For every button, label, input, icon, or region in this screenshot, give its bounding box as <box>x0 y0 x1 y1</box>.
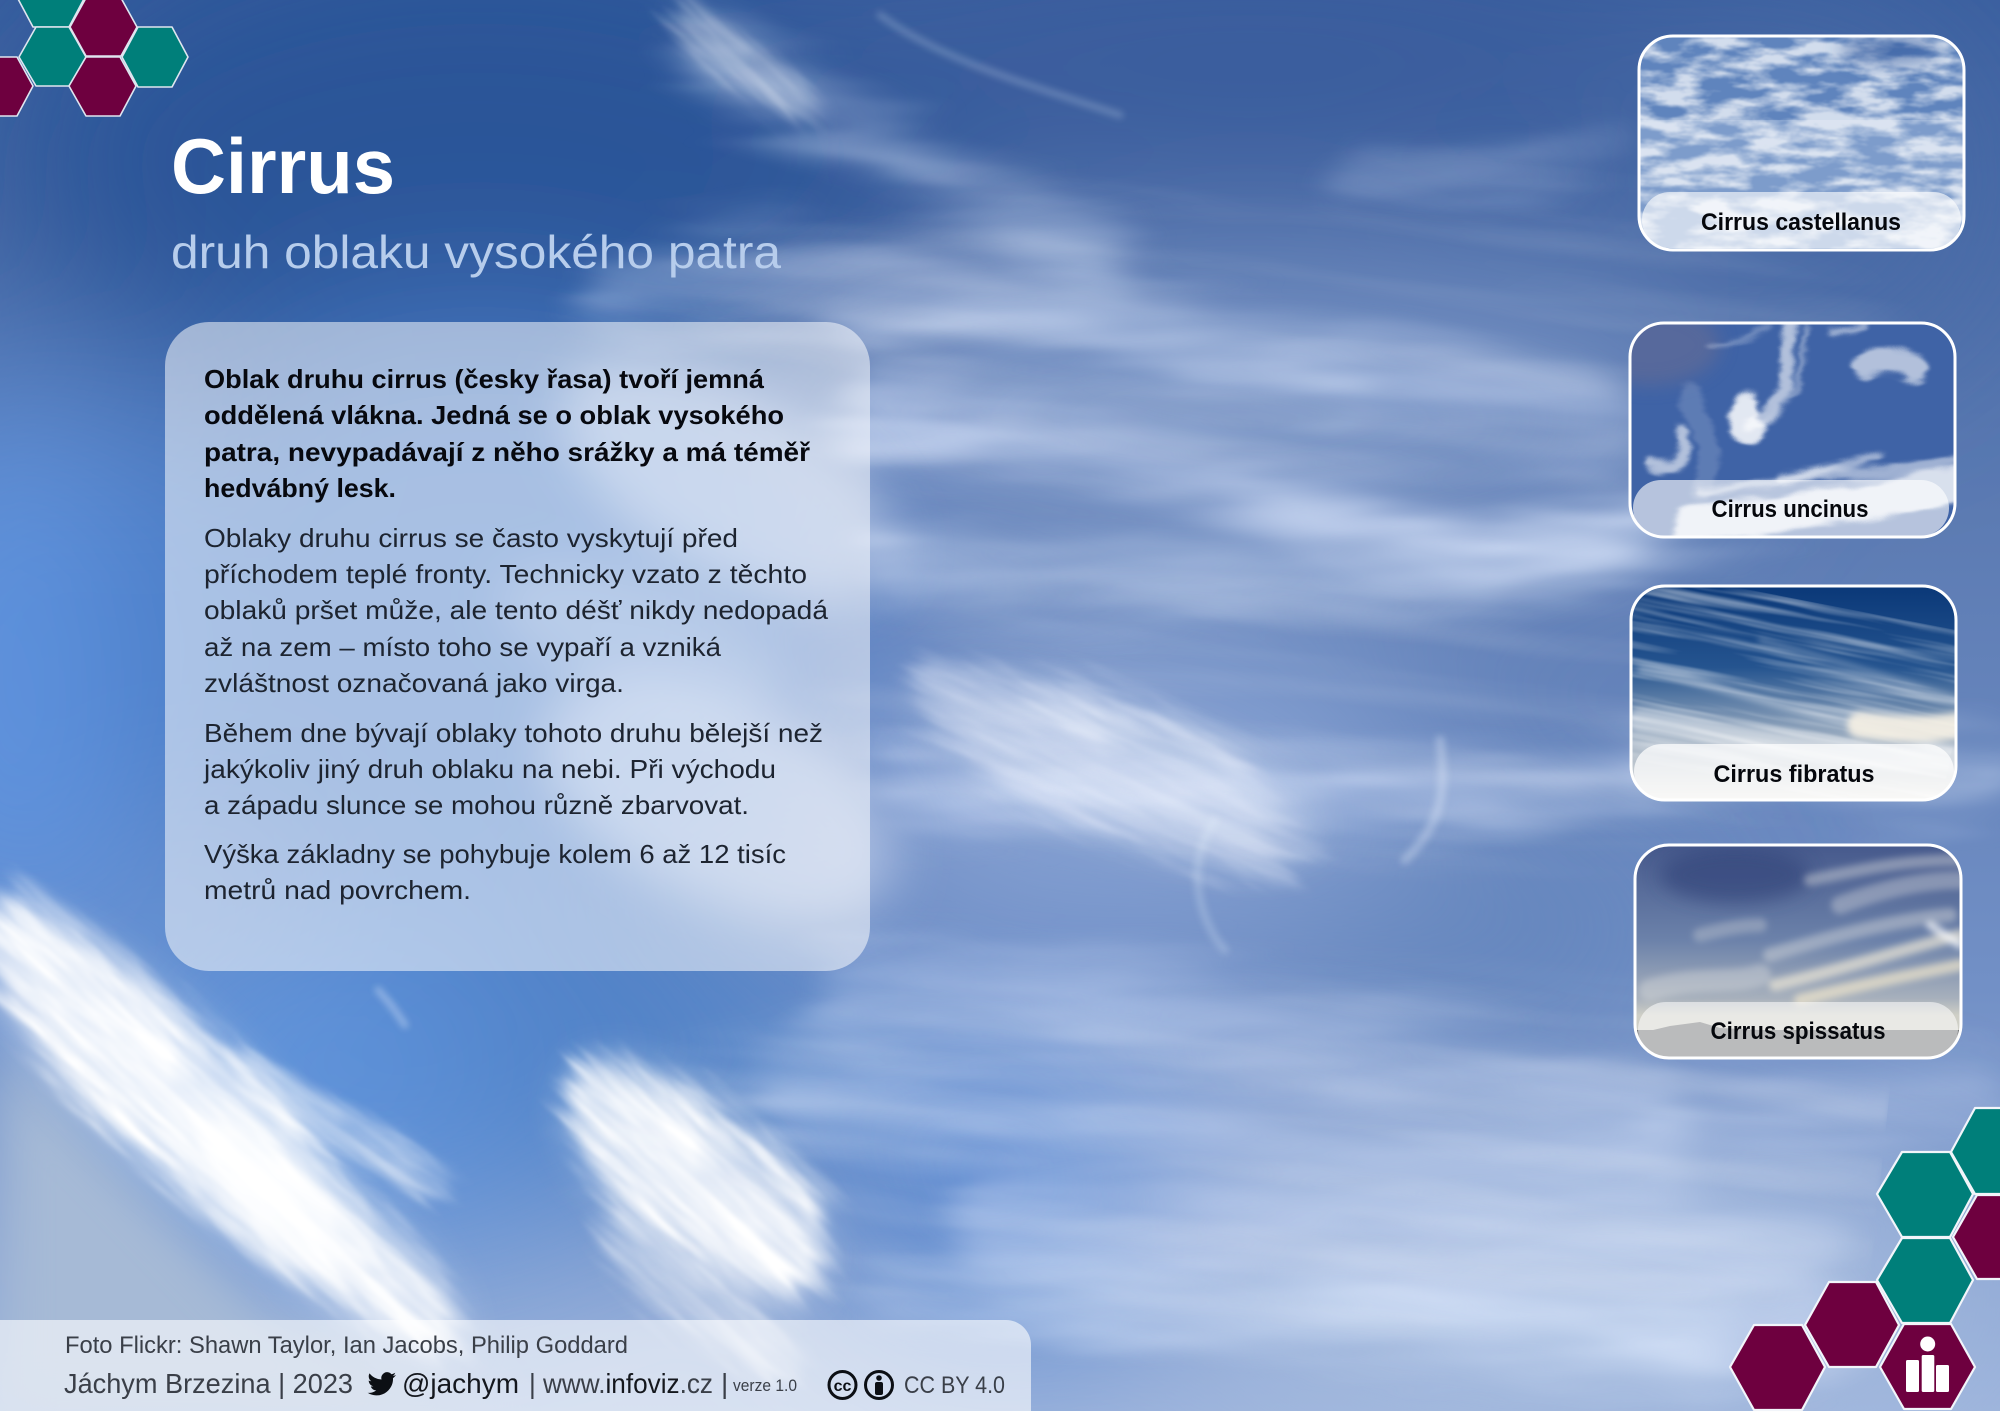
title: Cirrus <box>171 122 395 210</box>
cloud: upper left wisp <box>0 870 159 995</box>
hexagon teal middle <box>19 27 86 86</box>
lead paragraph: hedvábný lesk. <box>204 473 396 503</box>
label: Cirrus uncinus <box>1712 496 1868 523</box>
lead paragraph: patra, nevypadávají z něho srážky a má téměř <box>204 437 811 467</box>
cloud: lower left main <box>0 887 379 1292</box>
hexagon cluster top left <box>0 0 188 116</box>
soft underlay lower left clouds <box>0 651 1326 1380</box>
icon: infoviz logo <box>1906 1336 1949 1392</box>
icon: creative commons <box>829 1372 856 1398</box>
footer panel <box>0 1320 1031 1411</box>
cloud: centre patch <box>528 1016 866 1339</box>
hexagon teal upper <box>1877 1152 1973 1237</box>
hexagon teal right <box>122 27 188 87</box>
hexagon maroon left <box>1730 1325 1825 1410</box>
grey lower left haze <box>0 1044 306 1348</box>
paragraph: colour: Během dne bývají oblaky tohoto druhu bělejší než <box>204 718 823 748</box>
photo credit: Foto Flickr: Shawn Taylor, Ian Jacobs, Philip Goddard <box>65 1332 628 1359</box>
icon: attribution <box>866 1372 892 1398</box>
thumbnail: Cirrus uncinus <box>1580 305 1960 537</box>
paragraph: colour: jakýkoliv jiný druh oblaku na nebi. Při východu <box>203 754 776 784</box>
paragraph: virga: oblaků pršet může, ale tento déšť nikdy nedopadá <box>204 595 829 625</box>
paragraph: virga: zvláštnost označovaná jako virga. <box>204 668 624 698</box>
lead paragraph: oddělená vlákna. Jedná se o oblak vysokého <box>204 400 784 430</box>
cloud: lower left strand <box>208 1122 470 1360</box>
cloud: feathered middle <box>885 615 1340 914</box>
thumbnail: Cirrus spissatus <box>1635 845 1961 1058</box>
label: Cirrus spissatus <box>1710 1018 1886 1045</box>
cloud: upper wisp <box>663 0 827 142</box>
author and year: Jáchym Brzezina | 2023 <box>64 1368 353 1399</box>
lead paragraph <box>204 364 811 503</box>
hexagon maroon top <box>70 0 137 56</box>
hexagon maroon right <box>1953 1195 2000 1279</box>
lead paragraph: Oblak druhu cirrus (česky řasa) tvoří jemná <box>204 364 765 394</box>
clouds behind panel <box>507 342 918 934</box>
paragraph: virga: až na zem – místo toho se vypaří a vzniká <box>204 632 722 662</box>
hexagon maroon with logo <box>1880 1324 1975 1409</box>
hexagon teal lower <box>1877 1238 1973 1323</box>
hexagon teal far right <box>1951 1108 2000 1194</box>
version separator: | <box>721 1368 728 1399</box>
website: | www.infoviz.cz <box>529 1368 713 1399</box>
hexagon cluster bottom right <box>1730 1108 2000 1410</box>
twitter handle: @jachym <box>402 1368 519 1399</box>
license: CC BY 4.0 <box>904 1372 1005 1399</box>
paragraph: virga: příchodem teplé fronty. Technicky vzato z těchto <box>204 559 807 589</box>
hexagon teal top <box>17 0 85 27</box>
paragraph: colour: a západu slunce se mohou různě zbarvovat. <box>204 790 749 820</box>
cloud: central strand <box>218 1036 462 1224</box>
label: Cirrus castellanus <box>1701 209 1901 236</box>
paragraph: height: metrů nad povrchem. <box>204 875 471 905</box>
hexagon maroon lower <box>69 57 136 116</box>
cloud: small patch <box>116 968 194 1052</box>
panel background <box>165 322 870 971</box>
paragraph: height <box>204 839 786 905</box>
hexagon maroon centre <box>1805 1282 1899 1367</box>
icon: twitter bird <box>368 1372 396 1395</box>
hexagon maroon left <box>0 57 33 116</box>
paragraph: virga: Oblaky druhu cirrus se často vyskytují před <box>204 523 738 553</box>
cloud: lower centre strand <box>581 1188 819 1412</box>
pale cloud bands <box>620 40 1990 1350</box>
version: verze 1.0 <box>733 1376 797 1395</box>
thumbnail: Cirrus fibratus <box>1605 569 1975 820</box>
thin wisps <box>378 15 1442 1025</box>
panel: description <box>165 322 870 971</box>
paragraph: colour <box>203 718 823 820</box>
subtitle: druh oblaku vysokého patra <box>171 226 781 278</box>
icon: creative commons: cc <box>834 1378 852 1395</box>
paragraph: virga <box>204 523 829 698</box>
paragraph: height: Výška základny se pohybuje kolem 6 až 12 tisíc <box>204 839 786 869</box>
thumbnail: Cirrus castellanus <box>1639 36 1964 250</box>
footer background <box>0 1320 1031 1411</box>
label: Cirrus fibratus <box>1714 761 1874 788</box>
